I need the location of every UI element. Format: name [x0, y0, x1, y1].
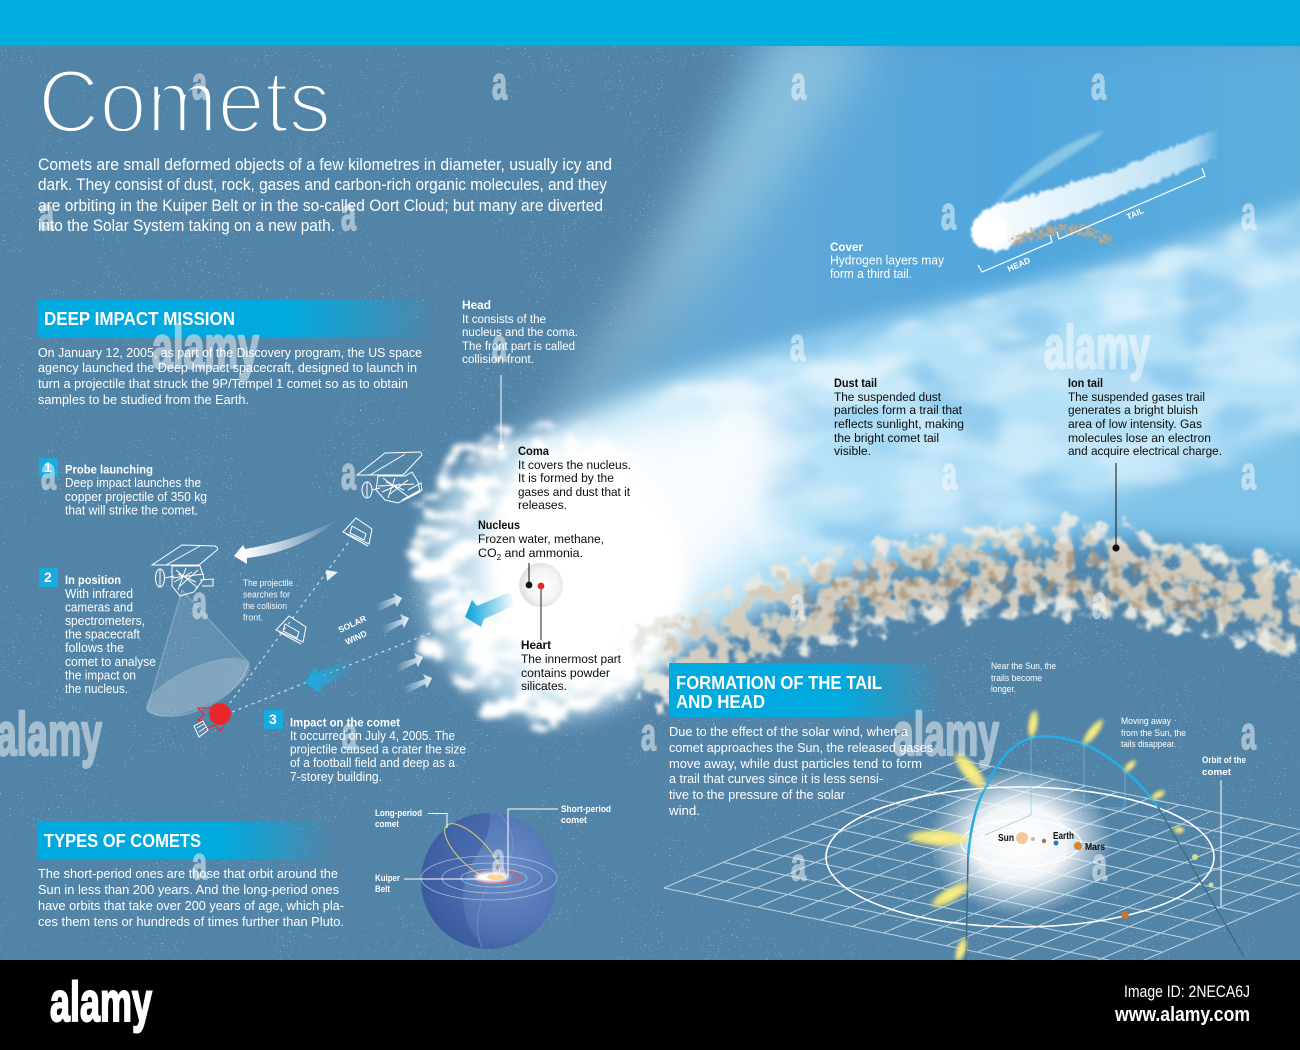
mars label: Mars [1085, 842, 1105, 853]
callout: coma: releases. [518, 498, 567, 512]
sun label: Sun [998, 833, 1014, 844]
watermarks: a [791, 838, 806, 890]
types text [38, 866, 344, 929]
callout: dust tail: Dust tail [834, 376, 877, 390]
mission text: On January 12, 2005, as part of the Discovery program, the US space [38, 345, 422, 360]
footer logo: alamy [50, 970, 152, 1033]
callout: nucleus: Frozen water, methane, [478, 532, 604, 546]
callout: cover: form a third tail. [830, 267, 912, 281]
step 3 text: 7-storey building. [290, 770, 382, 784]
step 2 text: spectrometers, [65, 614, 145, 628]
website: www.alamy.com [1114, 1004, 1250, 1026]
watermarks: a [342, 707, 357, 759]
step 3 badge [264, 710, 283, 729]
callout: dust tail: visible. [834, 444, 871, 458]
pale streak above the comet head [520, 30, 880, 470]
heading: FORMATION OF THE TAIL [676, 672, 882, 693]
formation text: comet approaches the Sun, the released gases [669, 740, 933, 755]
callout: nucleus: and ammonia. [501, 546, 583, 560]
oort cloud sphere [421, 813, 557, 949]
nucleus sphere [519, 563, 563, 607]
small comet diagram [967, 128, 1220, 274]
step 2 badge: 2 [44, 569, 52, 585]
step 2 badge [39, 568, 58, 587]
planets [1031, 837, 1129, 919]
solar wind label [337, 613, 368, 647]
panel: types of comets [37, 804, 611, 949]
watermarks: alamy [152, 314, 259, 381]
short-period label: comet [561, 815, 587, 825]
heading: AND HEAD [676, 691, 765, 712]
mission text [38, 345, 422, 407]
watermarks: a [341, 447, 356, 499]
watermarks: a [192, 576, 207, 628]
step 3 badge: 3 [269, 711, 277, 727]
watermarks: a [641, 708, 656, 760]
icon: spacecraft in position [152, 545, 218, 596]
main comet illustration [412, 20, 1300, 723]
callout: ion tail: Ion tail [1068, 376, 1103, 390]
callout: coma: It covers the nucleus. [518, 458, 631, 472]
watermarks: a [791, 57, 806, 109]
step 2 text [65, 573, 156, 696]
watermarks: a [1092, 838, 1107, 890]
icon: projectile middle [276, 616, 306, 644]
title: Comets [38, 51, 331, 151]
formation text: a trail that curves since it is less sensi- [669, 771, 883, 786]
watermarks: a [192, 57, 207, 109]
callout: coma: Coma [518, 444, 549, 458]
formation text: tive to the pressure of the solar [669, 787, 846, 802]
heading bar [669, 663, 941, 718]
mission text: agency launched the Deep Impact spacecraft, designed to launch in [38, 360, 417, 375]
moving away note: tails disappear. [1121, 739, 1176, 750]
step 2 text: follows the [65, 641, 124, 655]
top cyan bar [0, 0, 1300, 46]
orbit rings [826, 787, 1214, 927]
intro text: dark. They consist of dust, rock, gases and carbon-rich organic molecules, and they [38, 175, 607, 194]
step 2 text: cameras and [65, 600, 133, 614]
step 1 text: Deep impact launches the [65, 476, 201, 490]
orbital diagram [664, 707, 1300, 978]
brown dust of small comet [1012, 229, 1112, 243]
projectile note [243, 578, 293, 624]
watermarks: a [492, 833, 505, 885]
projectile note: the collision [243, 601, 287, 612]
tail of small comet [970, 128, 1220, 252]
sun glow [928, 768, 1112, 916]
callout: ion tail: The suspended gases trail [1068, 390, 1205, 404]
projectile note: front. [243, 612, 263, 624]
tail bracket [1057, 168, 1205, 239]
callout: heart: contains powder [521, 666, 610, 680]
intro text: Comets are small deformed objects of a few kilometres in diameter, usually icy and [38, 155, 612, 174]
earth label: Earth [1053, 831, 1074, 842]
third hydrogen tail [995, 130, 1105, 205]
panel: deep impact mission [37, 299, 466, 784]
head of small comet [967, 211, 1013, 253]
panel: formation of the tail and head [664, 661, 1300, 978]
head bracket [978, 235, 1052, 272]
callout: ion tail: molecules lose an electron [1068, 431, 1211, 445]
step 3 text: of a football field and deep as a [290, 756, 455, 770]
step 1 text: copper projectile of 350 kg [65, 490, 207, 504]
callout: head: nucleus and the coma. [462, 325, 578, 339]
formation text: move away, while dust particles tend to form [669, 756, 922, 771]
callout: cover: Cover [830, 240, 863, 254]
solar wind arrows [376, 593, 432, 694]
near the sun note: longer. [991, 684, 1016, 695]
solar wind label: WIND [344, 628, 368, 647]
callout: ion tail [1068, 376, 1222, 552]
callout: heart: The innermost part [521, 652, 622, 666]
step 1 badge [39, 458, 58, 477]
callout: dust tail: particles form a trail that [834, 403, 963, 417]
callout: heart: silicates. [521, 679, 567, 693]
heading bar [37, 822, 332, 859]
watermarks: a [1241, 187, 1256, 239]
watermarks: a [39, 188, 54, 240]
moving away note: from the Sun, the [1121, 728, 1186, 739]
heading bar [37, 299, 437, 338]
observation cone [139, 590, 257, 728]
intro text: into the Solar System taking on a new path. [38, 216, 335, 235]
callout: coma: It is formed by the [518, 471, 614, 485]
moving away note [1121, 716, 1186, 750]
blue arrow lower [305, 659, 354, 693]
callout: dust tail: reflects sunlight, making [834, 417, 964, 431]
step 3 text: It occurred on July 4, 2005. The [290, 729, 455, 743]
callout: nucleus [478, 518, 604, 588]
watermarks: a [790, 578, 805, 630]
watermarks: a [941, 187, 956, 239]
watermarks: alamy [1044, 314, 1150, 381]
comet orbit hidden part [966, 807, 1244, 960]
callout: ion tail: area of low intensity. Gas [1068, 417, 1202, 431]
step 2 text: comet to analyse [65, 655, 156, 669]
short-period label: Short-period [561, 804, 611, 814]
image id: Image ID: 2NECA6J [1124, 982, 1250, 1001]
kuiper label [375, 873, 401, 894]
watermarks [0, 57, 1256, 890]
callout: dust tail [834, 376, 964, 458]
red impact [194, 703, 231, 737]
step 2 text: the nucleus. [65, 682, 128, 696]
callout: head: The front part is called [462, 339, 575, 353]
near the sun note: Near the Sun, the [991, 661, 1056, 672]
formation text: wind. [668, 803, 700, 818]
comet dots [1192, 854, 1214, 888]
long-period label: comet [375, 819, 399, 829]
callout: coma: gases and dust that it [518, 485, 631, 499]
moving away note: Moving away [1121, 716, 1171, 727]
callout: nucleus: 2 [497, 553, 502, 562]
projectile note: searches for [243, 590, 290, 600]
tail label: TAIL [1125, 205, 1145, 222]
arrow: head direction blue [465, 592, 515, 627]
head label: HEAD [1006, 255, 1032, 274]
types text: ces them tens or hundreds of times further than Pluto. [38, 914, 344, 929]
mission text: samples to be studied from the Earth. [38, 392, 249, 407]
watermarks: a [942, 447, 957, 499]
watermarks: a [192, 837, 207, 889]
step 1 text [65, 462, 207, 518]
types text: The short-period ones are those that orbit around the [38, 866, 338, 881]
step 2 text: the impact on [65, 668, 136, 682]
short-period label [561, 804, 611, 825]
step 2 text: In position [65, 573, 121, 587]
callout: head [462, 298, 578, 450]
step 1 text: that will strike the comet. [65, 504, 198, 518]
watermarks: a [1092, 576, 1107, 628]
orbit of the comet callout: comet [1202, 767, 1232, 778]
perspective grid [664, 760, 1300, 978]
step 3 text [290, 716, 466, 784]
step 2 text: With infrared [65, 587, 133, 601]
heading: TYPES OF COMETS [44, 831, 201, 851]
callout: dust tail: the bright comet tail [834, 431, 939, 445]
comet orbit projections [985, 738, 1125, 835]
pale band: dust tail glow [500, 195, 1300, 670]
footer [0, 960, 1300, 1050]
projectile path dashed [230, 543, 430, 712]
near the sun note [991, 661, 1056, 695]
long-period label [375, 808, 422, 829]
intro text: are orbiting in the Kuiper Belt or in the so-called Oort Cloud; but many are diverted [38, 196, 603, 215]
dust tail [640, 569, 1300, 680]
callout: ion tail: and acquire electrical charge. [1068, 444, 1222, 458]
watermarks: a [492, 319, 507, 371]
callout: head: collision front. [462, 352, 534, 366]
projectile note: The projectile [243, 578, 293, 589]
kuiper label: Kuiper [375, 873, 401, 883]
step 2 text: the spacecraft [65, 628, 140, 642]
callout: cover: Hydrogen layers may [830, 254, 945, 268]
callout: coma [518, 444, 631, 512]
callout: nucleus: Nucleus [478, 518, 520, 532]
callout: ion tail: generates a bright bluish [1068, 403, 1198, 417]
sun [1016, 832, 1028, 844]
watermarks: alamy [893, 701, 999, 768]
intro text [38, 155, 612, 235]
callout: cover [830, 240, 945, 281]
types text: have orbits that take over 200 years of age, which pla- [38, 898, 344, 913]
watermarks: a [1241, 447, 1256, 499]
watermarks: a [492, 57, 507, 109]
orbit of the comet callout [1202, 755, 1246, 906]
callout: heart [521, 583, 622, 693]
watermarks: a [41, 447, 56, 499]
watermarks: a [341, 188, 356, 240]
icon: projectile top [343, 518, 372, 546]
white coma [412, 395, 790, 723]
heading [676, 672, 882, 712]
callout: head: Head [462, 298, 491, 312]
oort leader lines [404, 809, 558, 879]
orbit of the comet callout: Orbit of the [1202, 755, 1246, 766]
watermarks: a [1241, 707, 1256, 759]
white curved arrow [234, 518, 340, 564]
comet tails along the orbit [903, 707, 1185, 965]
callout: nucleus: CO [478, 546, 497, 560]
watermarks: a [790, 318, 805, 370]
kuiper label: Belt [375, 884, 390, 894]
icon: spacecraft launching [357, 452, 422, 503]
formation text [668, 724, 933, 818]
callout: heart: Heart [521, 638, 551, 652]
solar wind label: SOLAR [337, 613, 368, 635]
arrow: projectile direction [326, 570, 338, 581]
formation text: Due to the effect of the solar wind, when a [669, 724, 909, 739]
watermarks: a [1091, 57, 1106, 109]
step 1 text: Probe launching [65, 462, 153, 476]
step 3 text: projectile caused a crater the size [290, 742, 466, 756]
sky glow behind comet [520, 20, 1300, 620]
comet orbit [968, 736, 1158, 857]
step 1 badge: 1 [44, 459, 52, 475]
watermarks: alamy [0, 701, 102, 768]
near the sun note: trails become [991, 673, 1042, 684]
callout: dust tail: The suspended dust [834, 390, 942, 404]
step 3 text: Impact on the comet [290, 716, 400, 730]
callout: head: It consists of the [462, 312, 546, 326]
types text: Sun in less than 200 years. And the long-period ones [38, 882, 339, 897]
heading: DEEP IMPACT MISSION [44, 309, 235, 329]
long-period label: Long-period [375, 808, 422, 818]
mission text: turn a projectile that struck the 9P/Tempel 1 comet so as to obtain [38, 376, 408, 391]
